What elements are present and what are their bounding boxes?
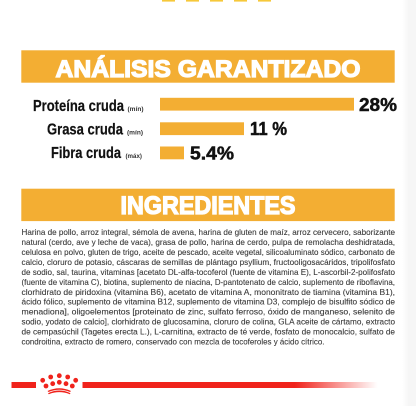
bar row: grasa cruda: 11 %: [250, 118, 287, 139]
red rule right fading out: [82, 382, 378, 388]
bar row: proteína cruda: 28%: [359, 94, 397, 115]
bar row: fibra cruda: [51, 142, 234, 164]
ingredients text block: sodio, yodato de calcio], clorhidrato de glucosamina, cloruro de colina, GLA aceite de cártamo, extracto: [22, 318, 395, 326]
ingredients text block: calcio, cloruro de potasio, cáscaras de semillas de plántago psyllium, fructooligosacáridos, tripolifosfato: [22, 258, 395, 267]
heading banner: análisis garantizado: ANÁLISIS GARANTIZADO: [56, 55, 360, 83]
panel: ingredients: [21, 189, 395, 346]
ingredients text block: natural (cerdo, ave y leche de vaca), grasa de pollo, harina de cerdo, pulpa de remolacha deshidratada,: [22, 238, 395, 247]
bar row: proteína cruda: (mín): [128, 106, 144, 113]
bar row: grasa cruda: Grasa cruda: [47, 122, 123, 138]
icon: row of cropped yellow stars: [162, 0, 271, 2]
ingredients text block: Harina de pollo, arroz integral, sémola de avena, harina de gluten de maíz, arroz cervecero, saborizante: [22, 228, 395, 237]
bar row: fibra cruda: Fibra cruda: [51, 145, 121, 162]
bar row: grasa cruda: [47, 118, 287, 139]
ingredients text block: menadiona], oligoelementos [proteinato de zinc, sulfato ferroso, óxido de manganeso, selenito de: [22, 308, 395, 316]
heading banner: ingredientes: [21, 189, 395, 221]
bar row: proteína cruda: [33, 94, 397, 115]
heading banner: ingredientes: INGREDIENTES: [120, 192, 296, 220]
bar row: grasa cruda: (mín): [127, 130, 143, 136]
bar row: proteína cruda: Proteína cruda: [33, 98, 124, 115]
ingredients text block: de sodio, sal, taurina, vitaminas [acetato DL-alfa-tocoferol (fuente de vitamina E), L-ascorbil-2-polifosfato: [22, 268, 395, 277]
panel: guaranteed analysis: [21, 50, 397, 163]
bar row: fibra cruda: 5.4%: [190, 142, 234, 164]
ingredients text block: ácido fólico, suplemento de vitamina B12, suplemento de vitamina D3, complejo de bisulfito sódico de: [22, 298, 395, 306]
ingredients text block: de cempasúchil (Tagetes erecta L.), L-carnitina, extracto de té verde, fosfato de monocalcio, sulfato de: [22, 328, 395, 336]
ingredients text block: [22, 228, 395, 346]
icon: royal crown: [40, 373, 78, 394]
ingredients text block: (fuente de vitamina C), biotina, suplemento de niacina, D-pantotenato de calcio, suplemento de riboflavina,: [22, 278, 395, 287]
bar row: fibra cruda: (máx): [126, 153, 142, 160]
heading banner: análisis garantizado: [21, 50, 395, 83]
ingredients text block: condroitina, extracto de romero, conservado con mezcla de tocoferoles y ácido cítrico.: [22, 338, 324, 346]
footer brand rule with crown: [12, 373, 378, 394]
red rule left: [12, 382, 36, 388]
ingredients text block: celulosa en polvo, gluten de trigo, aceite de pescado, aceite vegetal, silicoaluminato sódico, carbonato de: [22, 248, 395, 257]
ingredients text block: clorhidrato de piridoxina (vitamina B6), acetato de vitamina A, mononitrato de tiamina (vitamina B1),: [22, 288, 395, 297]
